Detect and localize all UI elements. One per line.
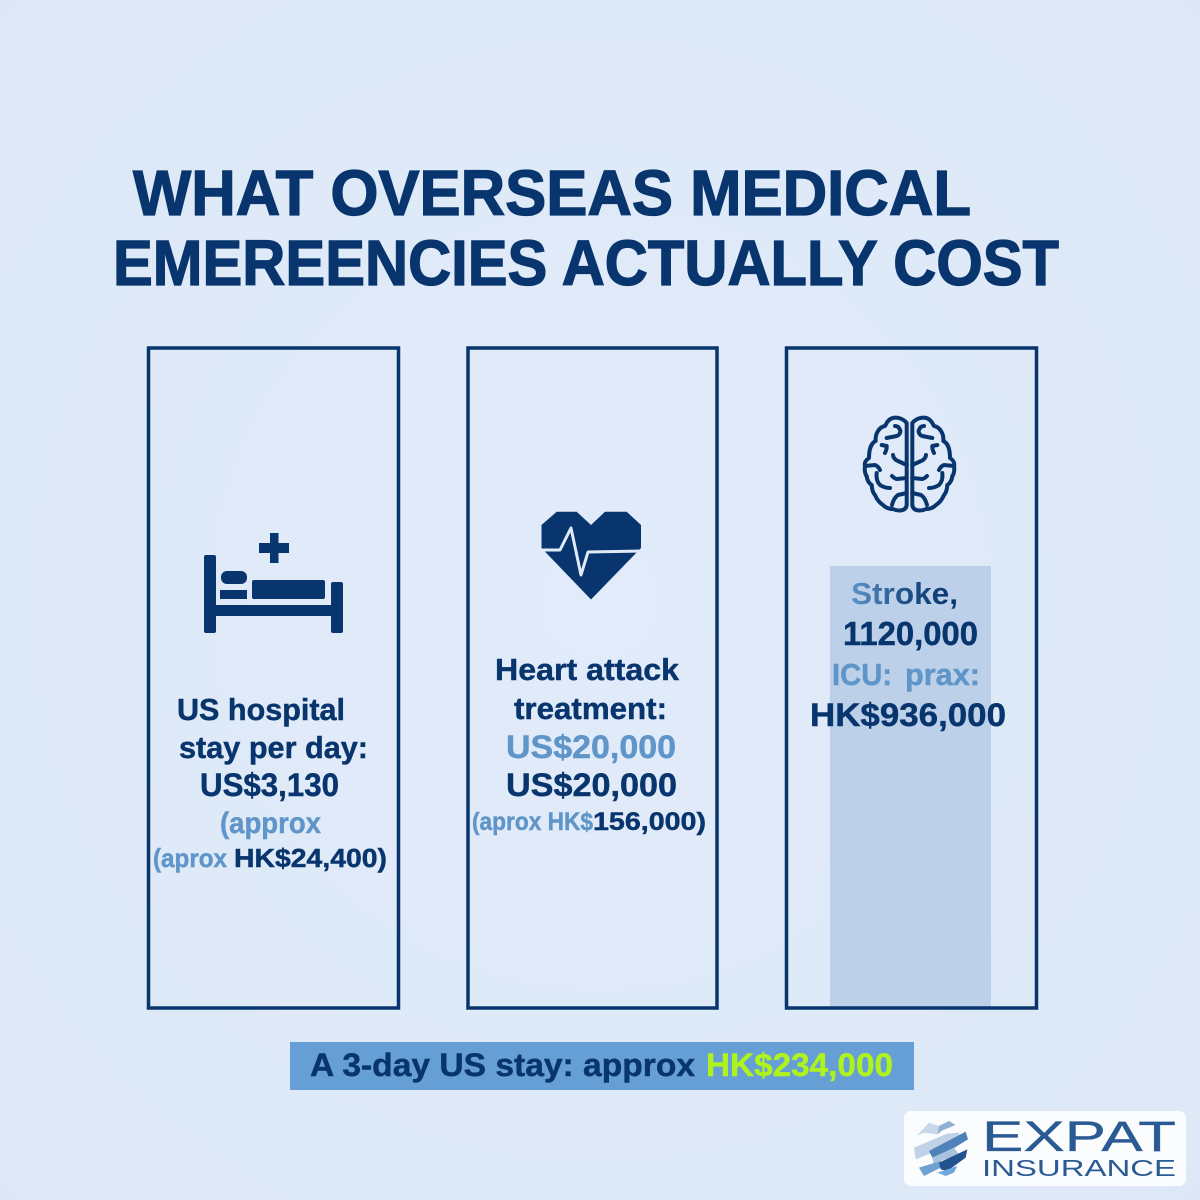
title: WHAT OVERSEAS MEDICAL — [133, 157, 971, 229]
icon: heart with pulse line — [541, 512, 641, 600]
text: stroke ICU cost — [810, 576, 1006, 733]
logo: Expat Insurance — [904, 1111, 1186, 1186]
text: stroke ICU cost: ICU: — [832, 657, 892, 692]
logo wordmark — [982, 1113, 1176, 1181]
panel: US hospital stay — [148, 348, 398, 1008]
highlight column — [830, 566, 991, 1007]
text: heart attack cost: Heart attack — [495, 652, 680, 687]
text: hospital stay cost: US hospital — [177, 692, 345, 727]
text: hospital stay cost: (aprox — [153, 843, 227, 873]
icon: hospital bed with cross — [204, 533, 343, 633]
text: heart attack cost: (aprox HK$ — [472, 808, 593, 836]
text: hospital stay cost — [153, 692, 387, 873]
text: stroke ICU cost: prax: — [905, 657, 980, 692]
text: hospital stay cost: HK$24,400) — [234, 843, 387, 873]
text: stroke ICU cost: Stroke, — [851, 576, 958, 611]
title — [113, 157, 1059, 299]
text: hospital stay cost: US$3,130 — [200, 767, 339, 803]
text: heart attack cost: US$20,000 — [506, 767, 677, 803]
panel: heart attack treatment — [468, 348, 717, 1008]
text: heart attack cost: treatment: — [514, 691, 667, 726]
logo wordmark: EXPAT — [982, 1113, 1176, 1161]
text: stroke ICU cost: 1120,000 — [843, 615, 978, 652]
icon: striped globe — [914, 1121, 968, 1176]
icon: brain — [865, 418, 954, 510]
callout: 3-day US stay: A 3-day US stay: approx — [310, 1047, 695, 1083]
text: heart attack cost: US$20,000 — [506, 729, 676, 765]
text: heart attack cost — [472, 652, 706, 836]
text: hospital stay cost: (approx — [220, 807, 321, 840]
panel: stroke ICU — [786, 348, 1036, 1008]
logo wordmark: INSURANCE — [982, 1155, 1176, 1181]
text: heart attack cost: 156,000) — [593, 808, 706, 836]
title: EMEREENCIES ACTUALLY COST — [113, 227, 1059, 299]
text: stroke ICU cost: HK$936,000 — [810, 697, 1006, 733]
text: hospital stay cost: stay per day: — [179, 730, 368, 765]
callout: 3-day US stay: HK$234,000 — [706, 1047, 893, 1083]
callout: 3-day US stay — [290, 1042, 914, 1090]
